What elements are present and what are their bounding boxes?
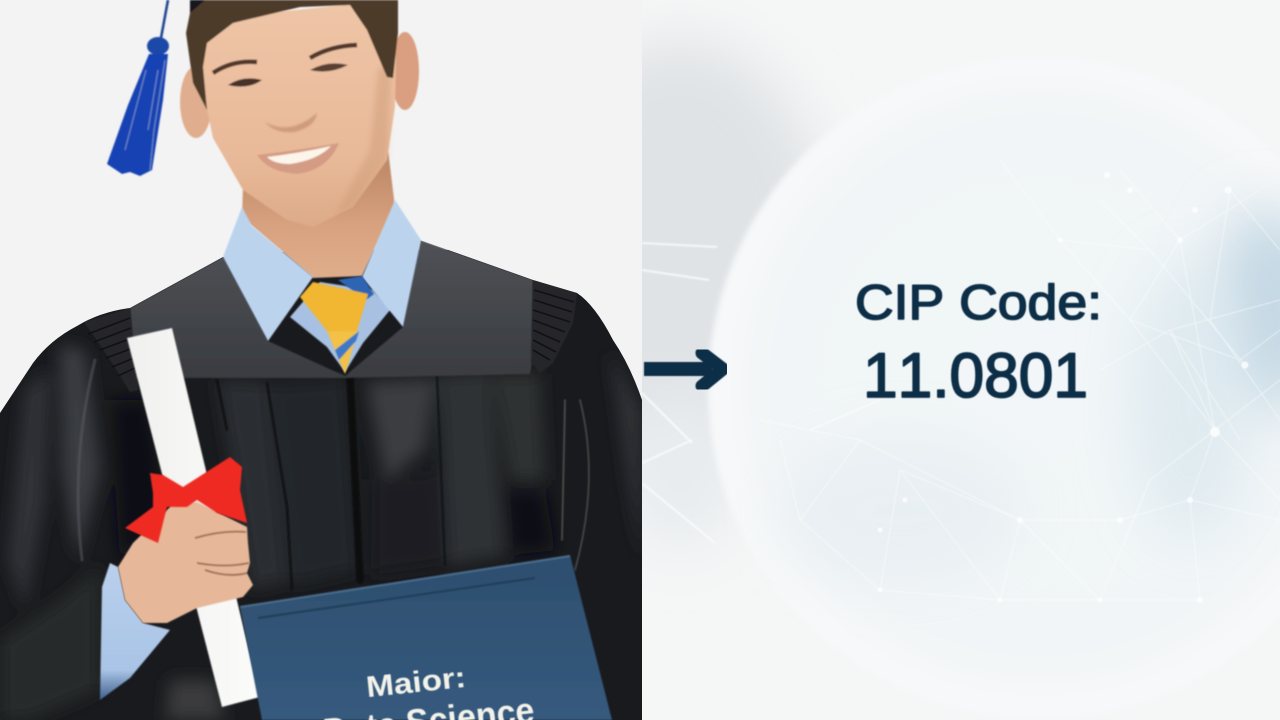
icon: white rolled diploma <box>127 328 260 707</box>
right eye <box>310 63 348 72</box>
mortarboard sliver <box>188 0 206 14</box>
globe lower tint <box>876 504 924 516</box>
lower left backdrop haze <box>642 476 718 531</box>
globe disc <box>708 144 832 494</box>
network nodes <box>878 172 1248 603</box>
shirt collar <box>223 200 421 372</box>
teeth <box>267 146 331 164</box>
shirt cuff <box>100 563 170 700</box>
blue diploma cover with text <box>240 555 612 720</box>
face <box>200 0 396 227</box>
right shoulder pleats <box>531 280 577 373</box>
network mesh <box>760 160 1280 600</box>
left panel: graduate photo illustration <box>0 0 642 720</box>
face shading <box>342 67 392 209</box>
icon: red ribbon bow <box>125 457 247 543</box>
gown body <box>0 240 642 720</box>
globe right secondary tint <box>1130 260 1250 540</box>
heading: CIP Code: CIP Code: <box>855 276 1102 330</box>
globe right blue tint <box>1215 210 1280 410</box>
gown fold lines <box>78 360 589 590</box>
faint background rays <box>642 243 717 543</box>
icon: blue graduation tassel <box>107 0 169 176</box>
left eyebrow <box>213 62 257 73</box>
book label: Maior: Maior: <box>365 661 467 704</box>
neck <box>242 150 395 278</box>
hair <box>186 0 398 110</box>
graduate head <box>180 0 419 278</box>
right eyebrow <box>310 45 357 58</box>
right ear <box>391 32 419 110</box>
arrow pointing to CIP code <box>644 353 723 386</box>
code number: 11.0801: 11.0801 <box>863 341 1088 411</box>
mouth <box>257 143 339 174</box>
left ear <box>180 66 212 138</box>
icon: yellow striped tie <box>300 276 374 374</box>
nose shadow <box>265 113 317 132</box>
gown sheen and folds <box>0 345 642 720</box>
pleat ripples <box>88 290 574 376</box>
hand gripping diploma <box>118 502 253 623</box>
left shoulder pleats <box>84 308 138 392</box>
left eye <box>228 78 262 87</box>
gown yoke <box>130 240 533 378</box>
right panel: network globe background <box>642 43 1280 602</box>
grey backdrop haze <box>642 35 814 421</box>
